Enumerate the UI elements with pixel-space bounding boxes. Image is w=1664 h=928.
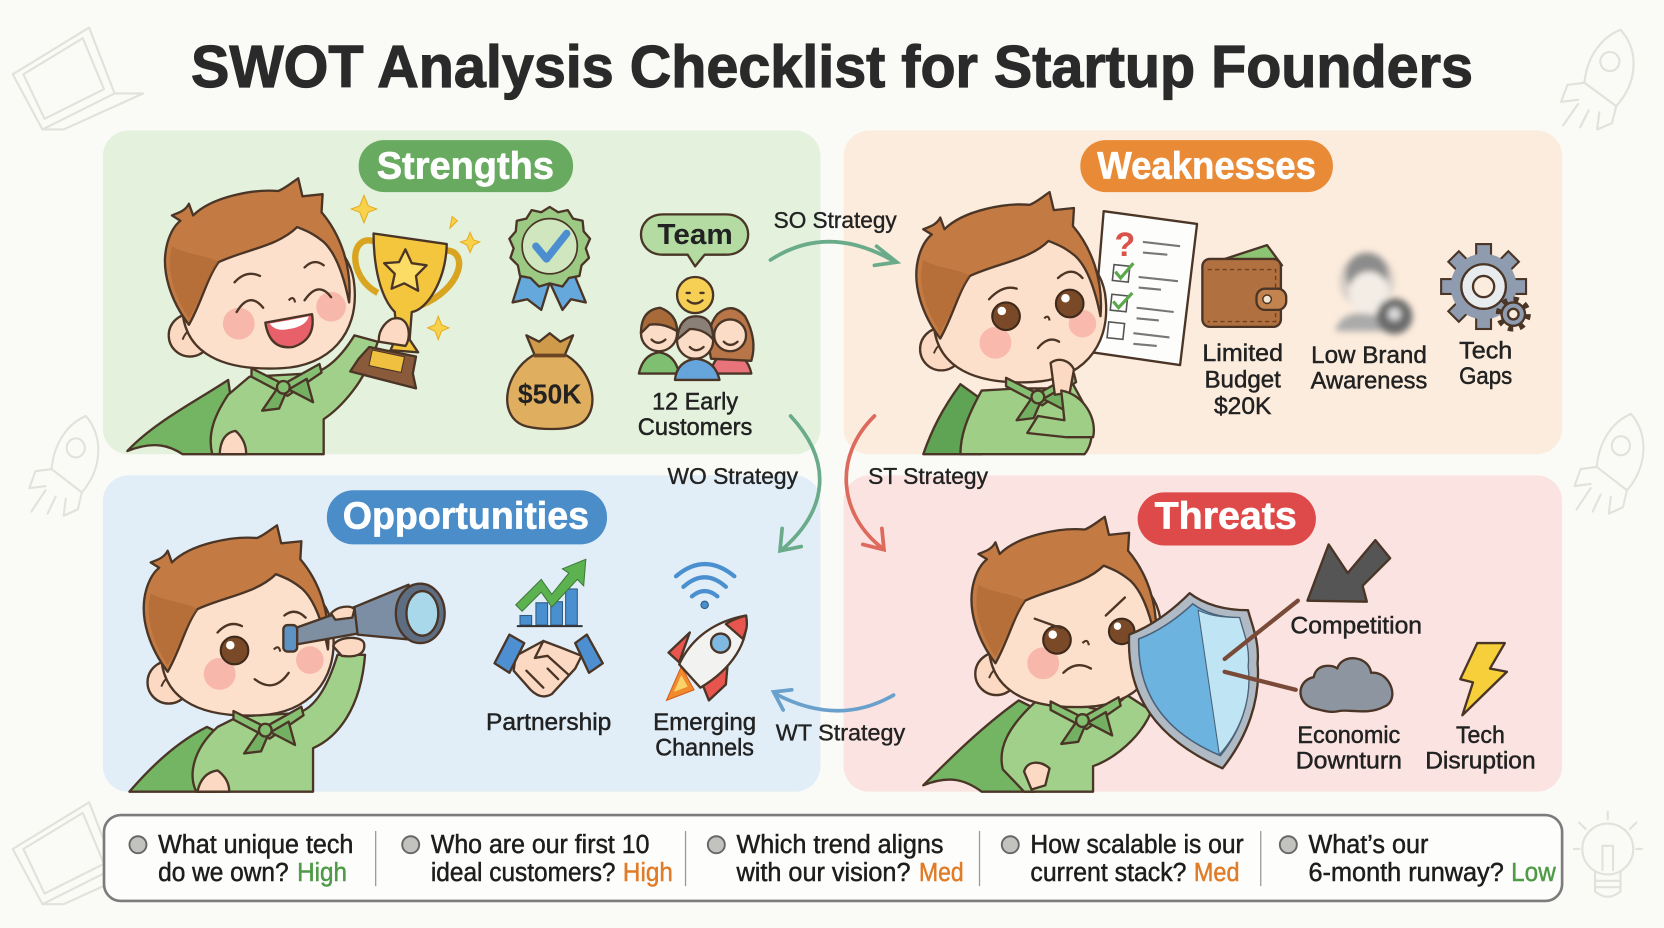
background doodle: rocket right [1575, 414, 1643, 514]
icon: gold trophy with star [350, 233, 459, 388]
checklist item 4: How scalable is our [1030, 831, 1244, 859]
icon: telescope [283, 584, 445, 656]
label: tech gaps [1459, 338, 1512, 390]
arrow: ST strategy: ST Strategy [868, 463, 988, 489]
panel: weaknesses [844, 131, 1562, 454]
panel: threats [844, 475, 1562, 792]
heading pill: weaknesses: Weaknesses [1097, 144, 1316, 187]
background doodle: rocket top right [1561, 30, 1634, 129]
speech bubble: team: Team [657, 219, 733, 251]
panel: strengths [103, 131, 820, 454]
arrow: WT strategy: WT Strategy [776, 720, 906, 746]
label: limited budget: Budget [1204, 366, 1281, 393]
sparkles [351, 195, 480, 340]
checklist item 1: What unique tech [158, 831, 353, 859]
label: emerging channels: Emerging [653, 709, 756, 736]
icon: wallet [1202, 245, 1286, 327]
checklist item 1: High [297, 859, 347, 887]
icon: handshake [495, 635, 603, 696]
background doodle: rocket left [29, 416, 98, 516]
label: low brand awareness: Low Brand [1311, 342, 1427, 369]
checklist item 4: Med [1194, 859, 1240, 887]
arrow: WO strategy: WO Strategy [668, 463, 798, 489]
checklist item 2: Who are our first 10 [431, 831, 649, 859]
icon: growth chart [516, 559, 586, 626]
checklist item 2 [402, 831, 673, 887]
heading pill: threats [1138, 492, 1316, 545]
icon: competition arrow [1307, 540, 1390, 602]
icon: shield [1129, 593, 1258, 768]
heading pill: opportunities: Opportunities [343, 494, 589, 537]
panel: checklist bar [104, 815, 1562, 901]
label: economic downturn [1296, 722, 1402, 774]
icon: gears [1441, 244, 1528, 329]
arrow: SO strategy [770, 207, 897, 265]
icon: money bag [507, 333, 592, 429]
label: emerging channels: Channels [655, 735, 754, 762]
title: SWOT Analysis Checklist for Startup Founders [191, 33, 1473, 100]
label: low brand awareness [1311, 342, 1427, 394]
character: happy founder with trophy [127, 178, 378, 454]
icon: early customers group [639, 277, 753, 380]
label: 12 early customers [638, 389, 752, 441]
label: competition: Competition [1290, 613, 1422, 640]
arrow: SO strategy: SO Strategy [774, 207, 897, 233]
arrow: WT strategy [774, 690, 906, 746]
checklist item 5: Low [1511, 859, 1556, 887]
label: tech gaps: Tech [1459, 338, 1512, 365]
icon: wifi signal [676, 564, 734, 609]
panel: opportunities [103, 475, 820, 792]
icon: blurred person [1335, 253, 1412, 334]
character: determined founder with shield [923, 517, 1161, 792]
character: worried founder thinking [916, 192, 1106, 454]
icon: spears hitting shield [1225, 601, 1298, 690]
icon: storm cloud [1300, 658, 1392, 712]
label: limited budget [1202, 340, 1283, 420]
label: economic downturn: Economic [1297, 722, 1400, 749]
checklist item 5: 6-month runway? [1308, 859, 1504, 887]
checklist item 4 [1002, 831, 1244, 887]
checklist item 1: do we own? [158, 859, 289, 887]
label: limited budget: Limited [1202, 340, 1283, 367]
label: tech disruption [1425, 722, 1536, 774]
speech bubble: team [641, 214, 748, 266]
label: 12 early customers: Customers [638, 414, 752, 441]
label: tech disruption: Disruption [1425, 747, 1536, 774]
arrow: ST strategy [846, 416, 988, 550]
label: emerging channels [653, 709, 756, 762]
checklist item 1 [129, 831, 353, 887]
label: limited budget: $20K [1214, 393, 1271, 420]
icon: verified badge [509, 207, 590, 310]
checklist item 3: with our vision? [735, 859, 911, 887]
arrow: WO strategy [668, 416, 820, 551]
icon: checklist paper [1092, 211, 1197, 365]
heading pill: strengths: Strengths [377, 144, 554, 187]
background doodle: laptop top left [13, 28, 143, 129]
icon: rocket with flame [666, 616, 747, 700]
checklist item 2: ideal customers? [431, 859, 616, 887]
checklist item 2: High [623, 859, 673, 887]
label: tech disruption: Tech [1456, 722, 1505, 749]
label: low brand awareness: Awareness [1311, 367, 1427, 394]
checklist item 3: Med [919, 859, 964, 887]
checklist item 5: What’s our [1308, 831, 1429, 859]
icon: lightning bolt [1460, 643, 1507, 715]
character: founder with telescope [129, 525, 365, 792]
background doodle: laptop bottom left [13, 802, 143, 904]
checklist item 4: current stack? [1030, 859, 1186, 887]
checklist item 5 [1280, 831, 1556, 887]
icon: checklist paper: ? [1115, 226, 1135, 264]
checklist item 3: Which trend aligns [736, 831, 943, 859]
label: economic downturn: Downturn [1296, 747, 1402, 774]
label: partnership: Partnership [486, 709, 611, 736]
heading pill: strengths [359, 140, 573, 192]
label: tech gaps: Gaps [1459, 363, 1512, 390]
label: 12 early customers: 12 Early [652, 389, 739, 416]
checklist item 3 [708, 831, 964, 887]
icon: money bag: $50K [518, 378, 582, 409]
heading pill: threats: Threats [1155, 494, 1297, 537]
background doodle: light bulb [1574, 812, 1642, 897]
